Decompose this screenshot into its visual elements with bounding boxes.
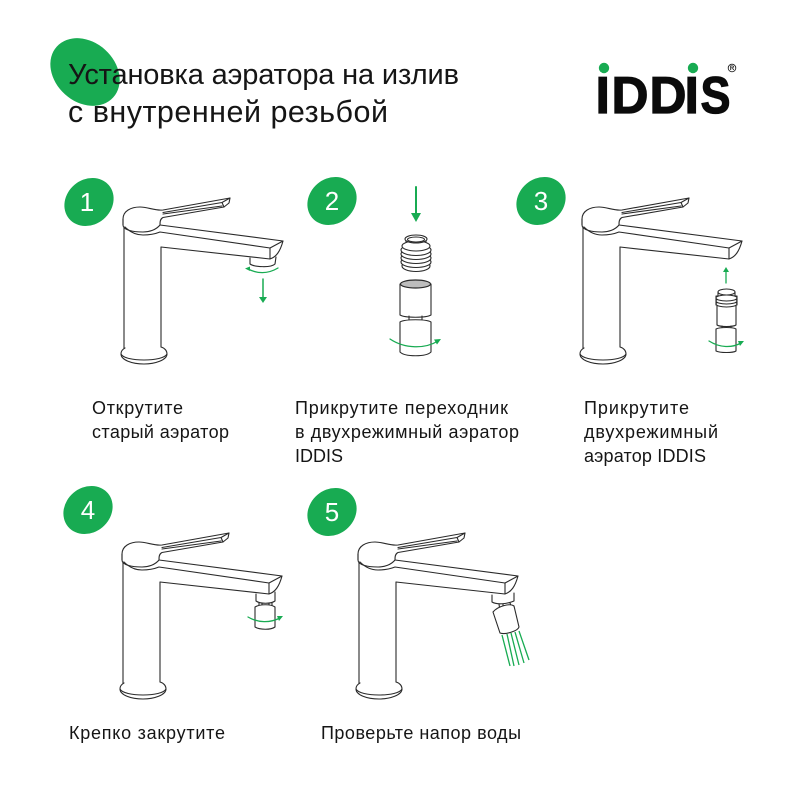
step 2 text <box>295 398 519 466</box>
step 1 text: Открутите <box>92 398 183 418</box>
down arrow 2 <box>411 187 421 222</box>
step 1 badge <box>55 168 123 236</box>
rotation arrow 4 <box>248 616 283 622</box>
faucet 3 <box>580 198 742 364</box>
step 3 text <box>584 398 718 466</box>
up arrow 3 <box>723 267 729 283</box>
rotation arrow 2 <box>390 339 441 347</box>
step 5 panel <box>298 478 529 743</box>
logo: IDDIS: D <box>650 67 686 125</box>
step 2 badge: 2 <box>325 186 339 216</box>
logo: IDDIS <box>596 63 736 125</box>
water streams <box>502 631 529 666</box>
step 3 panel <box>507 167 744 466</box>
title <box>68 59 459 129</box>
step 3 badge: 3 <box>534 186 548 216</box>
title: с внутренней резьбой <box>68 95 388 129</box>
tilted aerator 5 <box>492 593 519 634</box>
down arrow 1 <box>259 279 267 303</box>
logo: IDDIS: R <box>730 66 735 72</box>
step 4 badge: 4 <box>81 495 95 525</box>
title blob <box>37 24 133 120</box>
step 3 text: Прикрутите <box>584 398 689 418</box>
logo: IDDIS: S <box>700 67 730 125</box>
rotation arrow 1 <box>245 266 278 273</box>
title: Установка аэратора на излив <box>68 59 459 91</box>
step 3 text: двухрежимный <box>584 422 718 442</box>
faucet 1 <box>121 198 283 364</box>
step 1 badge: 1 <box>80 187 94 217</box>
step 3 text: аэратор IDDIS <box>584 446 706 466</box>
faucet 5 <box>356 533 518 699</box>
installed aerator 4 <box>255 592 275 629</box>
step 2 text: Прикрутите переходник <box>295 398 508 418</box>
step 4 badge <box>54 476 122 544</box>
step 4 panel <box>54 476 283 743</box>
step 1 panel <box>55 168 283 442</box>
logo: IDDIS: I <box>684 67 699 125</box>
step 1 text <box>92 398 229 442</box>
step 2 badge <box>298 167 366 235</box>
faucet 4 <box>120 533 282 699</box>
step 5 text: Проверьте напор воды <box>321 723 521 743</box>
step 2 text: IDDIS <box>295 446 343 466</box>
adapter <box>401 235 431 272</box>
step 4 text: Крепко закрутите <box>69 723 225 743</box>
step 3 badge <box>507 167 575 235</box>
step 2 text: в двухрежимный аэратор <box>295 422 519 442</box>
rotation arrow 3 <box>709 341 744 347</box>
logo: IDDIS: I <box>596 67 610 125</box>
dual-mode aerator <box>400 280 431 356</box>
step 1 text: старый аэратор <box>92 422 229 442</box>
step 5 badge <box>298 478 366 546</box>
logo: IDDIS: D <box>612 67 648 125</box>
step 2 panel <box>295 167 519 466</box>
step 5 badge: 5 <box>325 497 339 527</box>
aerator with adapter <box>716 289 737 352</box>
